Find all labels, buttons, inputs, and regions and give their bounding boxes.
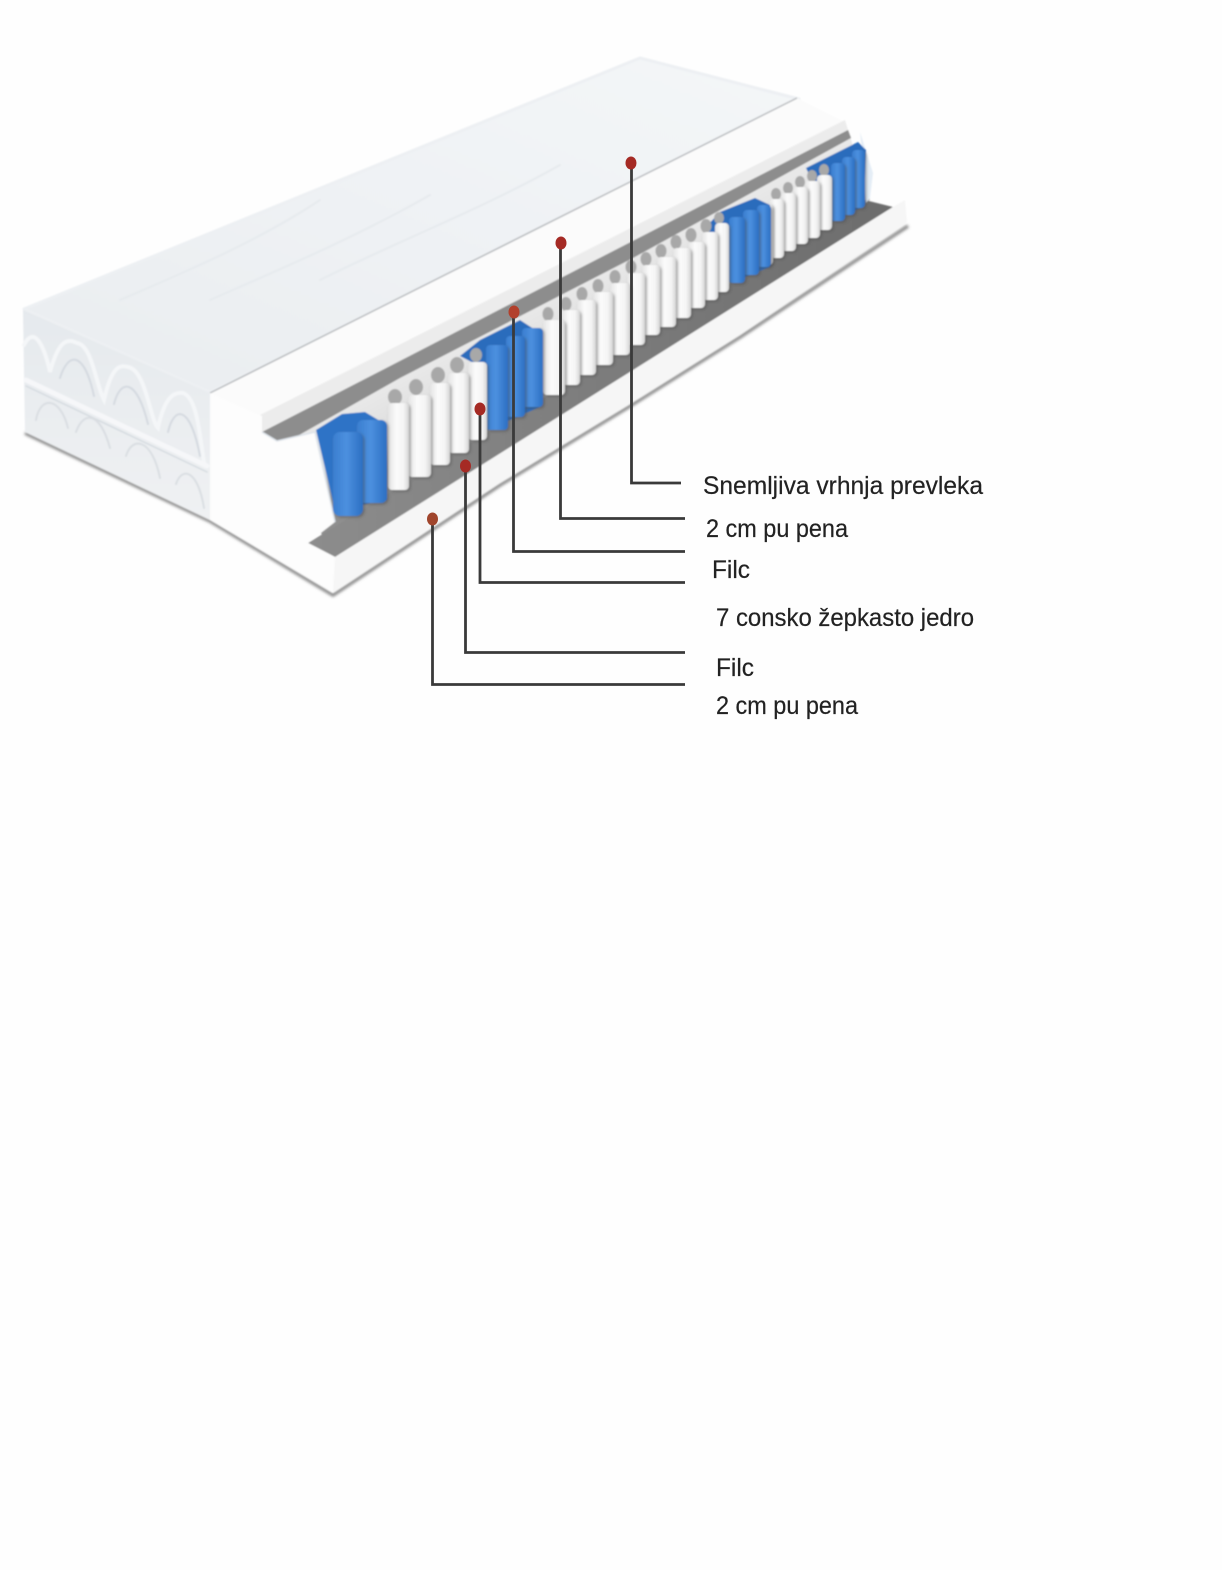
lower felt layer xyxy=(308,200,893,557)
right end wedge xyxy=(860,132,873,203)
mattress illustration xyxy=(23,58,908,595)
interior behind the springs xyxy=(262,130,870,557)
callout: upper felt xyxy=(508,306,750,584)
callout: upper foam: 2 cm pu pena xyxy=(706,515,848,543)
callout: pocket spring core: 7 consko žepkasto jedro xyxy=(716,604,974,632)
callout: upper felt: Filc xyxy=(712,556,750,584)
callout: lower foam xyxy=(427,512,858,720)
quilting pattern xyxy=(24,165,560,508)
callout: lower felt: Filc xyxy=(716,654,754,682)
callout: removable top cover xyxy=(626,156,983,500)
pocket springs core xyxy=(316,142,866,516)
spring zone: centre-right blue xyxy=(705,198,771,283)
callout: pocket spring core xyxy=(474,402,974,632)
spring zone: far right blue xyxy=(806,142,866,222)
quilted cover side face xyxy=(23,310,210,520)
spring zone: left white xyxy=(388,348,487,490)
spring zone: centre-left blue xyxy=(460,320,543,430)
upper felt layer xyxy=(262,130,851,447)
foam end face xyxy=(210,393,335,593)
removable top foam cover xyxy=(210,98,848,432)
callout: lower foam: 2 cm pu pena xyxy=(716,692,858,720)
callout: lower felt xyxy=(460,460,754,682)
callout: upper foam xyxy=(556,236,848,543)
spring zone: centre white xyxy=(542,212,729,395)
spring zone: far left blue xyxy=(316,412,387,516)
bottom foam layer xyxy=(300,200,907,593)
spring zone: right white xyxy=(760,164,832,265)
quilted cover top surface xyxy=(24,58,799,392)
callout: removable top cover: Snemljiva vrhnja prevleka xyxy=(703,472,983,500)
ground shadow xyxy=(25,226,908,595)
